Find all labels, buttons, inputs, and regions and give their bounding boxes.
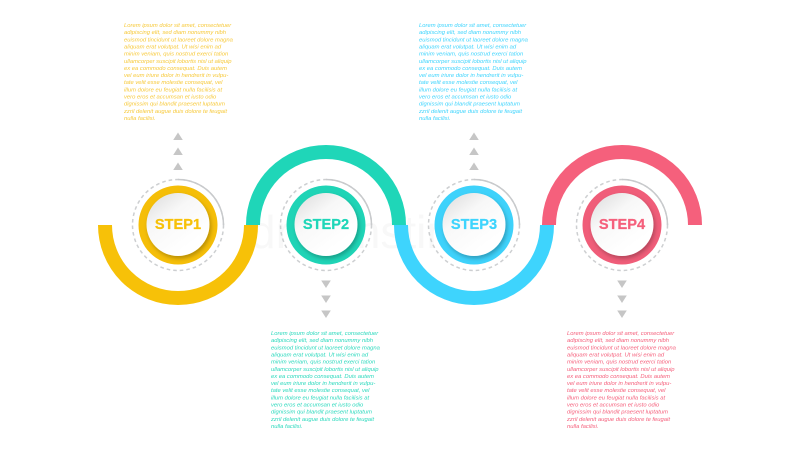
text block: step 3: dignissim qui blandit praesent luptatum: [419, 102, 520, 108]
text block: step 3: euismod tincidunt ut laoreet dolore magna: [419, 37, 529, 43]
arrows up: step 1: [173, 132, 183, 170]
text block: step 4: vel eum iriure dolor in hendrerit in vulpu-: [567, 381, 671, 387]
text block: step 1: euismod tincidunt ut laoreet dolore magna: [124, 37, 234, 43]
text block: step 2: [270, 331, 381, 430]
watermark: dreamstime: [250, 206, 490, 258]
text block: step 4: [566, 331, 677, 430]
text block: step 1: illum dolore eu feugiat nulla facilisis at: [124, 87, 222, 93]
step 3 badge: [428, 180, 520, 270]
text block: step 4: ullamcorper suscipit lobortis nisl ut aliquip: [567, 367, 675, 373]
text block: step 3: zzril delenit augue duis dolore te feugait: [418, 109, 522, 115]
step 1 badge: STEP1: [155, 217, 201, 233]
text block: step 1: zzril delenit augue duis dolore te feugait: [123, 109, 227, 115]
text block: step 4: aliquam erat volutpat. Ut wisi enim ad: [567, 352, 665, 358]
step 3 badge: STEP3: [451, 217, 497, 233]
text block: step 1: aliquam erat volutpat. Ut wisi enim ad: [124, 44, 222, 50]
step 1 badge: [132, 180, 224, 270]
step 2 badge: [280, 180, 372, 270]
text block: step 3: illum dolore eu feugiat nulla facilisis at: [419, 87, 517, 93]
text block: step 1: adipiscing elit, sed diam nonummy nibh: [124, 30, 226, 36]
text block: step 2: Lorem ipsum dolor sit amet, consectetuer: [271, 331, 379, 337]
text block: step 1: ullamcorper suscipit lobortis nisl ut aliquip: [124, 59, 232, 65]
text block: step 4: ex ea commodo consequat. Duis autem: [567, 374, 670, 380]
step 4 badge: STEP4: [599, 217, 646, 233]
text block: step 2: ex ea commodo consequat. Duis autem: [271, 374, 374, 380]
text block: step 1: minim veniam, quis nostrud exerci tation: [124, 52, 228, 58]
text block: step 3: [418, 23, 529, 122]
band: yellow arc: [105, 225, 251, 298]
arrows down: step 2: [321, 280, 331, 318]
text block: step 3: ullamcorper suscipit lobortis nisl ut aliquip: [419, 59, 527, 65]
text block: step 1: ex ea commodo consequat. Duis autem: [124, 66, 227, 72]
text block: step 2: nulla facilisi.: [271, 424, 303, 430]
text block: step 2: adipiscing elit, sed diam nonummy nibh: [271, 338, 373, 344]
text block: step 2: vel eum iriure dolor in hendrerit in vulpu-: [271, 381, 375, 387]
text block: step 1: dignissim qui blandit praesent luptatum: [124, 102, 225, 108]
text block: step 1: vel eum iriure dolor in hendrerit in vulpu-: [124, 73, 228, 79]
text block: step 3: nulla facilisi.: [419, 116, 451, 122]
text block: step 1: [123, 23, 234, 122]
text block: step 4: zzril delenit augue duis dolore te feugait: [566, 417, 670, 423]
text block: step 2: illum dolore eu feugiat nulla facilisis at: [271, 395, 369, 401]
step 2 badge: STEP2: [303, 217, 349, 233]
text block: step 4: euismod tincidunt ut laoreet dolore magna: [567, 345, 677, 351]
arrows down: step 4: [617, 280, 627, 318]
text block: step 3: tate velit esse molestie consequat, vel: [419, 80, 518, 86]
text block: step 2: ullamcorper suscipit lobortis nisl ut aliquip: [271, 367, 379, 373]
text block: step 3: vel eum iriure dolor in hendrerit in vulpu-: [419, 73, 523, 79]
text block: step 2: zzril delenit augue duis dolore te feugait: [270, 417, 374, 423]
text block: step 4: adipiscing elit, sed diam nonummy nibh: [567, 338, 669, 344]
text block: step 2: euismod tincidunt ut laoreet dolore magna: [271, 345, 381, 351]
text block: step 4: dignissim qui blandit praesent luptatum: [567, 410, 668, 416]
text block: step 4: tate velit esse molestie consequat, vel: [567, 388, 666, 394]
text block: step 4: Lorem ipsum dolor sit amet, consectetuer: [567, 331, 675, 337]
text block: step 3: aliquam erat volutpat. Ut wisi enim ad: [419, 44, 517, 50]
text block: step 4: nulla facilisi.: [567, 424, 599, 430]
text block: step 3: adipiscing elit, sed diam nonummy nibh: [419, 30, 521, 36]
text block: step 2: tate velit esse molestie consequat, vel: [271, 388, 370, 394]
band: pink arc: [549, 152, 695, 225]
text block: step 1: nulla facilisi.: [124, 116, 156, 122]
text block: step 1: vero eros et accumsan et iusto odio: [124, 94, 217, 100]
text block: step 2: aliquam erat volutpat. Ut wisi enim ad: [271, 352, 369, 358]
text block: step 2: vero eros et accumsan et iusto odio: [271, 402, 364, 408]
text block: step 3: minim veniam, quis nostrud exerci tation: [419, 52, 523, 58]
step 4 badge: [576, 180, 668, 270]
text block: step 3: ex ea commodo consequat. Duis autem: [419, 66, 522, 72]
band: blue arc: [401, 225, 547, 298]
text block: step 4: illum dolore eu feugiat nulla facilisis at: [567, 395, 665, 401]
text block: step 4: minim veniam, quis nostrud exerci tation: [567, 360, 671, 366]
text block: step 3: vero eros et accumsan et iusto odio: [419, 94, 512, 100]
text block: step 2: dignissim qui blandit praesent luptatum: [271, 410, 372, 416]
band: teal arc: [253, 152, 399, 225]
text block: step 1: tate velit esse molestie consequat, vel: [124, 80, 223, 86]
text block: step 1: Lorem ipsum dolor sit amet, consectetuer: [124, 23, 232, 29]
text block: step 3: Lorem ipsum dolor sit amet, consectetuer: [419, 23, 527, 29]
text block: step 2: minim veniam, quis nostrud exerci tation: [271, 360, 375, 366]
text block: step 4: vero eros et accumsan et iusto odio: [567, 402, 660, 408]
arrows up: step 3: [469, 132, 479, 170]
